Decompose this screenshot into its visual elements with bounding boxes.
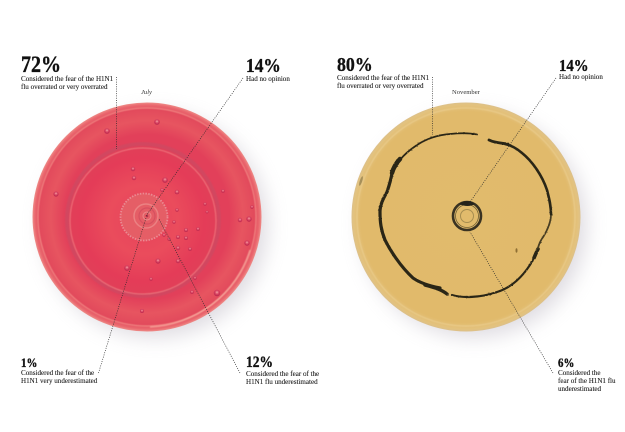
red petri dish: July (32, 102, 267, 337)
stat: 6% underestimated, November: 6% (558, 356, 574, 370)
stat: 80% overrated, November: Considered the fear of the H1N1 (337, 74, 429, 82)
stat: 6% underestimated, November: fear of the H1N1 flu (558, 377, 616, 385)
stat: 72% overrated, July: flu overrated or very overrated (21, 83, 107, 91)
central hub (120, 194, 168, 240)
speck (516, 248, 518, 253)
rim smudge (358, 176, 364, 186)
stat: 12% underestimated, July: 12% (246, 354, 273, 371)
label: July: July (141, 89, 152, 96)
stat: 14% no opinion, November: Had no opinion (559, 72, 603, 80)
bubbles (53, 119, 254, 313)
dark broken ring (380, 133, 551, 297)
inner ring (66, 143, 220, 297)
stat: 80% overrated, November: flu overrated or very overrated (337, 82, 423, 90)
stat: 14% no opinion, July: Had no opinion (246, 74, 290, 82)
stat: 14% no opinion, July: 14% (246, 55, 281, 77)
central hub (453, 201, 481, 230)
stat: 1% underestimated, July: Considered the fear of the (21, 369, 94, 377)
stat: 6% underestimated, November: underestimated (558, 385, 601, 393)
stat: 12% underestimated, July: H1N1 flu underestimated (246, 378, 318, 386)
stat: 1% underestimated, July: 1% (21, 356, 37, 370)
stat: 80% overrated, November (337, 54, 429, 90)
stat: 72% overrated, July: 72% (21, 52, 61, 77)
stat: 1% underestimated, July (21, 356, 98, 385)
stat: 6% underestimated, November: Considered the (558, 369, 600, 377)
stat: 72% overrated, July: Considered the fear of the H1N1 (21, 74, 113, 82)
label: November: November (452, 89, 480, 96)
stat: 6% underestimated, November (558, 356, 616, 393)
leader lines (98, 77, 556, 373)
yellow petri dish: November (352, 102, 586, 337)
stat: 1% underestimated, July: H1N1 very underestimated (21, 377, 97, 385)
stat: 14% no opinion, November: 14% (559, 56, 589, 75)
stat: 14% no opinion, November (559, 56, 603, 80)
stat: 14% no opinion, July (246, 55, 290, 82)
stat: 72% overrated, July (21, 52, 113, 91)
stat: 12% underestimated, July: Considered the fear of the (246, 370, 319, 378)
stat: 12% underestimated, July (246, 354, 319, 386)
stat: 80% overrated, November: 80% (337, 54, 373, 76)
